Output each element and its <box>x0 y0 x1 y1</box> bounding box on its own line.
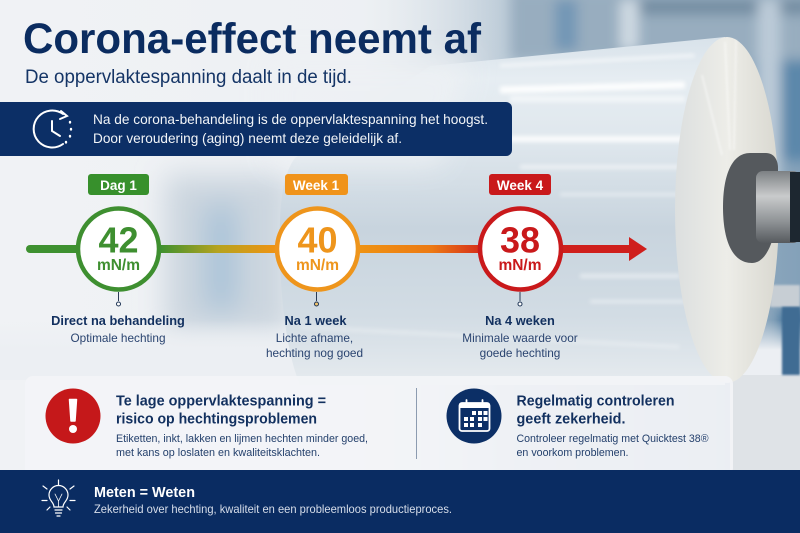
milestone: Week 4: mN/m <box>498 257 542 274</box>
advice text: en voorkom problemen. <box>516 447 628 459</box>
risk text: risico op hechtingsproblemen <box>116 412 317 428</box>
milestone: Week 4: goede hechting <box>480 346 560 360</box>
milestone: Week 1: 40 <box>297 220 338 260</box>
banner text: Door veroudering (aging) neemt deze geleidelijk af. <box>93 130 402 146</box>
milestone: Week 4: Minimale waarde voor <box>462 331 578 345</box>
milestone: Week 4 <box>462 174 578 360</box>
milestone: Week 1: hechting nog goed <box>266 346 363 360</box>
risk text: Etiketten, inkt, lakken en lijmen hechten minder goed, <box>116 433 368 445</box>
milestone: Dag 1: mN/m <box>97 257 140 274</box>
milestone: Week 4: Na 4 weken <box>485 313 555 328</box>
milestone: Dag 1 <box>51 174 185 345</box>
subtitle: De oppervlaktespanning daalt in de tijd. <box>25 67 352 88</box>
banner text <box>93 111 488 146</box>
advice text: geeft zekerheid. <box>516 412 626 428</box>
milestone: Week 1: Na 1 week <box>285 313 347 328</box>
footer band <box>0 470 800 533</box>
icon: alert <box>46 388 100 444</box>
milestone: Dag 1: 42 <box>98 220 139 260</box>
milestone: Week 4: 38 <box>500 220 540 260</box>
panel: warnings and advice <box>25 376 733 476</box>
footer text: Zekerheid over hechting, kwaliteit en een probleemloos productieproces. <box>94 502 452 516</box>
milestone: Week 4: Week 4 <box>497 178 544 193</box>
icon: calendar <box>446 388 502 444</box>
intro banner <box>0 102 512 156</box>
timeline with arrow <box>30 237 647 261</box>
banner text: Na de corona-behandeling is de oppervlaktespanning het hoogst. <box>93 111 488 127</box>
footer text <box>94 485 452 516</box>
title: Corona-effect neemt af <box>23 15 482 63</box>
milestone: Week 1: Lichte afname, <box>276 331 353 345</box>
milestone: Week 1: Week 1 <box>293 178 340 193</box>
footer text: Meten = Weten <box>94 485 195 501</box>
advice text <box>516 394 708 459</box>
roll core hub <box>723 153 800 263</box>
risk text: met kans op loslaten en kwaliteitsklachten. <box>116 447 320 459</box>
milestone: Dag 1: Direct na behandeling <box>51 313 185 328</box>
risk text <box>116 394 368 459</box>
advice text: Controleer regelmatig met Quicktest 38® <box>516 433 708 445</box>
milestone: Dag 1: Dag 1 <box>100 178 137 193</box>
milestone: Dag 1: Optimale hechting <box>70 331 166 345</box>
advice text: Regelmatig controleren <box>516 394 674 410</box>
milestone: Week 1 <box>266 174 363 360</box>
film roll <box>270 37 779 385</box>
milestone: Week 1: mN/m <box>296 257 339 274</box>
icon: clock with arrow <box>34 110 71 148</box>
risk text: Te lage oppervlaktespanning = <box>116 394 326 410</box>
icon: light bulb <box>42 480 75 516</box>
